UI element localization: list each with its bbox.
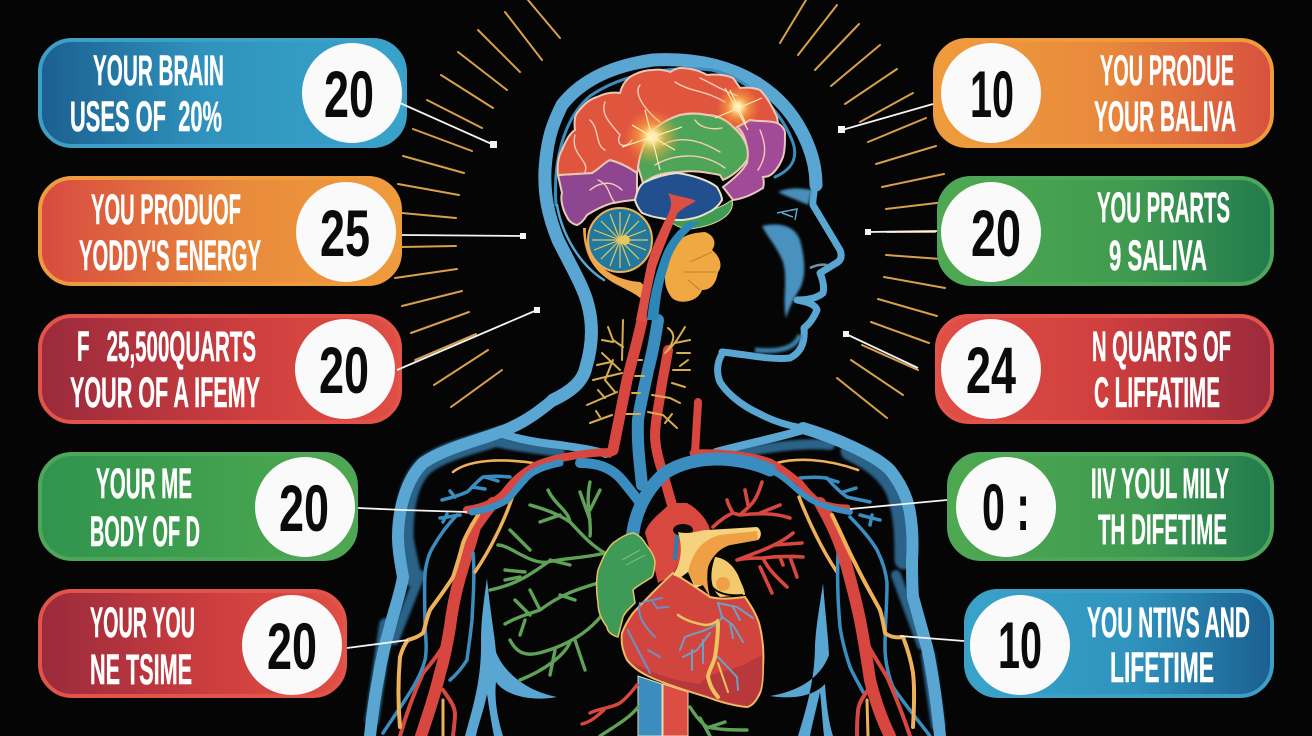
panel: left 3: [40, 316, 400, 422]
panel: right 1: 10: [970, 57, 1014, 131]
badge: [296, 182, 396, 282]
panel: right 4: [949, 454, 1272, 559]
panel: left 4: YOUR ME: [96, 460, 192, 508]
badge: [941, 182, 1041, 282]
aorta: [645, 503, 710, 583]
spinal cord: [636, 193, 700, 322]
connector lines: [347, 103, 964, 648]
neck nerves: [587, 320, 690, 428]
panel: right 5: LIFETIME: [1110, 644, 1214, 692]
human body figure: [370, 60, 940, 736]
panel: right 3: [937, 316, 1272, 422]
red neck vessel: [613, 320, 642, 450]
panel: left 5: 20: [267, 609, 317, 683]
panel: right 3: 24: [966, 333, 1016, 407]
panel: left 2: 25: [320, 196, 370, 270]
badge: [956, 457, 1056, 557]
panel: left 3: F 25,500QUARTS: [77, 323, 256, 371]
red cerebrum: [558, 68, 779, 175]
badge: [255, 457, 355, 557]
panel: left 1: USES OF 20%: [70, 93, 222, 141]
panel: right 1: [935, 40, 1272, 146]
green lung branches: [490, 482, 605, 680]
badge: [242, 595, 342, 695]
badge: [302, 43, 402, 143]
radiating rays: [395, 0, 945, 418]
green lobe: [596, 533, 655, 637]
purple lobe right: [723, 120, 785, 200]
panel: left 5: [40, 591, 345, 696]
right atrium: [711, 557, 745, 597]
brain: [558, 68, 785, 322]
brain stem dark blue: [635, 173, 722, 220]
green under-lobe: [670, 200, 732, 229]
panel: left 1: [40, 40, 405, 146]
panel: left 5: NE TSIME: [90, 646, 192, 694]
gland lines: [684, 252, 716, 290]
badge: [970, 595, 1070, 695]
pulmonary artery: [673, 527, 761, 597]
head and neck outline: [545, 60, 841, 428]
green lobe: [638, 114, 748, 183]
heart body: [622, 573, 763, 707]
left shoulder vessels: [383, 452, 612, 736]
panel: left 2: YODDY'S ENERGY: [79, 232, 261, 280]
red lung branches: [713, 482, 803, 593]
panel: left 4: BODY OF D: [90, 508, 200, 556]
heart shadow: [632, 655, 762, 706]
panel: left 4: [40, 454, 356, 559]
panel: left 2: YOU PRODUOF: [91, 186, 241, 234]
green lobe highlights: [622, 550, 645, 565]
orange gland: [665, 232, 720, 302]
brain folds: [574, 78, 765, 203]
glow: upper right: [715, 85, 762, 130]
panel: left 3: 20: [319, 333, 369, 407]
panel: right 5: 10: [998, 608, 1042, 682]
panel: left 1: 20: [324, 57, 374, 131]
badge: [941, 43, 1041, 143]
glow: upper left: [622, 109, 682, 170]
panel: right 2: 9 SALIVA: [1109, 232, 1207, 280]
purple lobe left: [558, 160, 637, 225]
panel: right 2: [939, 178, 1272, 284]
central vessels in neck and chest: [580, 320, 740, 505]
torso and arms outline: [370, 400, 940, 736]
panel: left 3: YOUR OF A IFEMY: [70, 369, 260, 417]
panel: left 1: YOUR BRAIN: [93, 47, 224, 95]
panel: left 4: 20: [279, 471, 329, 545]
right shoulder vessels: [693, 453, 930, 736]
lower trunk vessels: [582, 676, 747, 736]
panel: left 5: YOUR YOU: [90, 599, 195, 647]
badge: [941, 319, 1041, 419]
badge: [295, 319, 395, 419]
coronary vessels: [628, 598, 753, 697]
panel: right 2: 20: [971, 196, 1021, 270]
face shading: [755, 188, 827, 351]
panel: left 2: [40, 178, 400, 284]
aortic hole: [673, 524, 693, 536]
panel: right 5: [966, 591, 1272, 696]
cerebellum: [583, 208, 652, 298]
body shading: [372, 436, 938, 725]
aortic blue arcs: [580, 459, 850, 540]
panel: right 4: 0 :: [982, 470, 1030, 544]
heart: [596, 503, 763, 707]
